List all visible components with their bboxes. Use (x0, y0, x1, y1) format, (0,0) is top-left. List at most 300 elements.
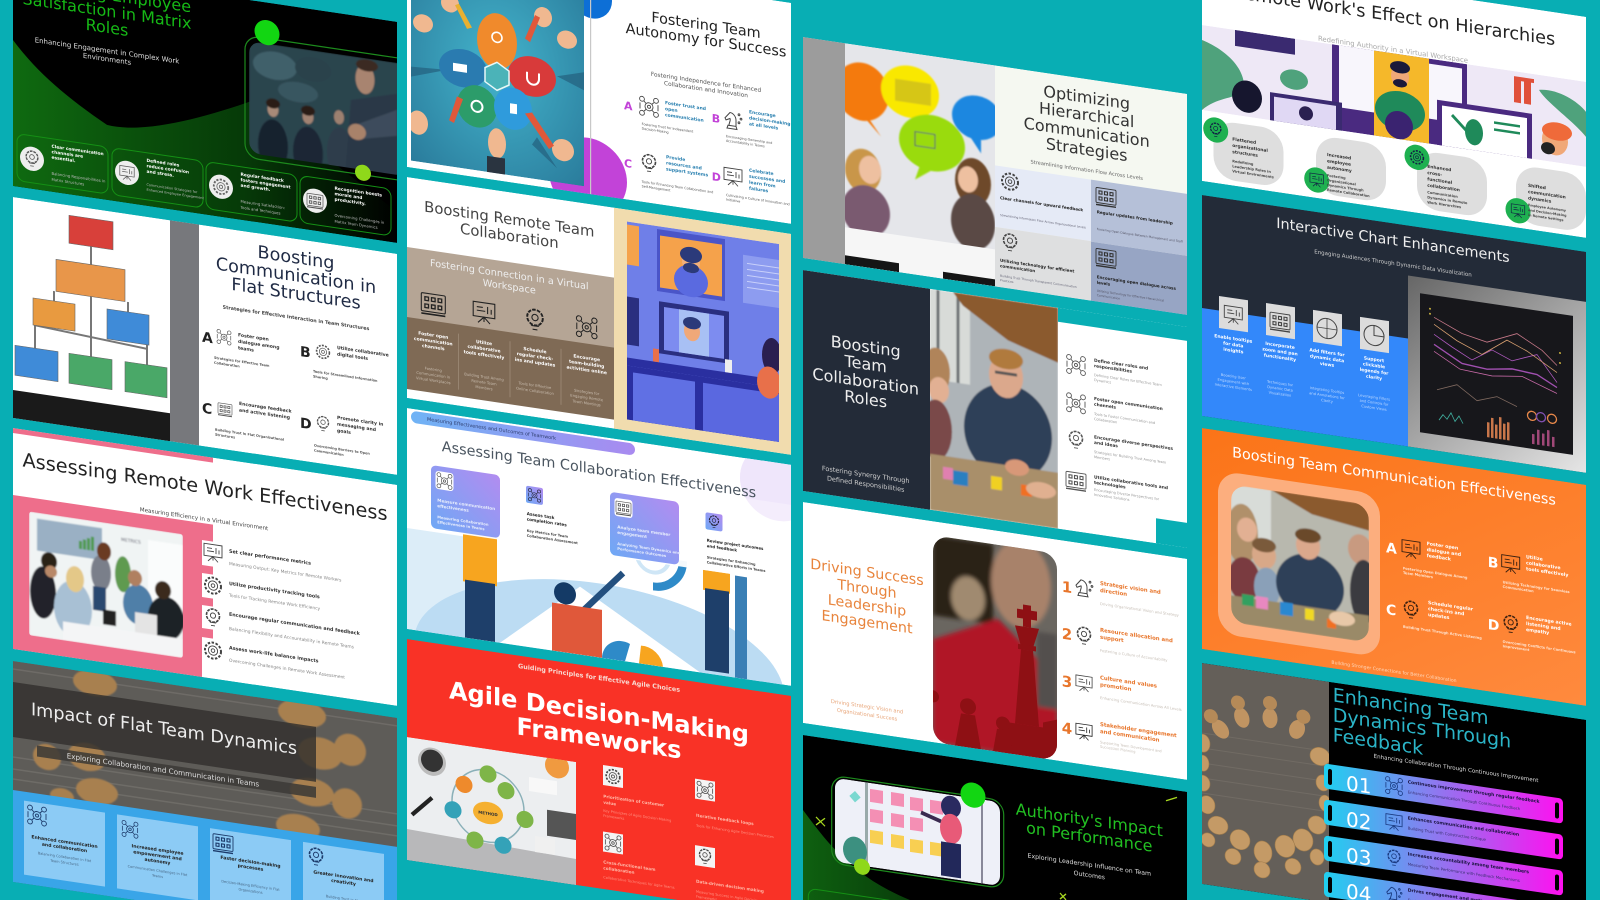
bar 01 (1324, 763, 1563, 827)
item D: Cultivating a Culture of Innovation and (726, 193, 790, 206)
cell 2: Regular updates from leadership (1097, 209, 1173, 226)
item A (624, 94, 706, 140)
bottom card (808, 888, 896, 900)
column 2: tools effectively (464, 349, 504, 361)
item C: resources and (666, 160, 702, 172)
column 3: Clarity (1321, 398, 1334, 404)
item 4: Utilize collaborative tools and (1094, 475, 1168, 491)
item B: Communication (1503, 585, 1534, 593)
item 3: Cross-functional team (603, 859, 655, 872)
title: Boosting Team Communication Effectiveness (1232, 445, 1556, 509)
card 3: Organizations (238, 887, 263, 895)
item 3 (206, 608, 361, 651)
item C: Encourage feedback (239, 402, 292, 415)
item C: Structures (215, 433, 235, 440)
title: on Performance (1026, 818, 1153, 856)
card C: Performance Outcomes (617, 547, 667, 558)
slide: Boosting Remote Team Collaboration (407, 177, 791, 455)
card A: Measuring Collaboration (437, 515, 488, 527)
analytics illustration (407, 490, 784, 781)
slide: Boosting Communication in Flat Structures (13, 197, 397, 475)
item D (706, 512, 765, 573)
card A: effectiveness (437, 503, 469, 513)
item B (526, 486, 578, 545)
card 1: Enhanced communication (31, 835, 98, 850)
column 2: Utilize (476, 340, 492, 347)
column 2 (464, 300, 504, 393)
column 4: and Controls for (1360, 399, 1389, 407)
column 3: Online Collaboration (516, 386, 555, 396)
column 3: dynamic data (1310, 353, 1344, 364)
card C: engagement (617, 530, 647, 539)
item 3 (1070, 431, 1173, 471)
item D: Overcoming Conflicts for Continuous (1503, 640, 1576, 654)
column 2: Incorporate (1265, 342, 1295, 351)
column 1: Boosting User (1221, 373, 1246, 380)
column 2: functionality (1264, 353, 1296, 363)
item B: B (300, 344, 311, 362)
accent circles (854, 765, 986, 893)
item 3: Balancing Flexibility and Accountability in Remote Teams (229, 626, 355, 651)
column 4: clarity (1366, 374, 1382, 382)
item 1 (1067, 354, 1162, 392)
photo frame (1218, 470, 1380, 657)
item D (712, 162, 790, 211)
bar 01: Continuous improvement through regular feedback (1408, 779, 1541, 805)
card 4 (303, 842, 384, 900)
grey band (170, 220, 199, 446)
item 2 (205, 576, 321, 612)
item B: Utilize collaborative (337, 346, 389, 359)
title: Impact of Flat Team Dynamics (31, 700, 297, 759)
item C: and active listening (239, 407, 290, 421)
title: Assessing Remote Work Effectiveness (22, 449, 388, 525)
item 4 (695, 845, 764, 900)
title: Assessing Team Collaboration Effectiveness (442, 439, 756, 502)
card 2 (1304, 133, 1386, 203)
cell 4: Utilizing Technology for Effective Hierarchical (1097, 289, 1164, 303)
card 4: in Remote Settings (1528, 213, 1563, 222)
item 1 (603, 765, 671, 828)
blue panel (13, 790, 397, 900)
column 3: Tools for Effective (519, 381, 551, 390)
column 1: Communication in (416, 371, 451, 380)
title: Leadership (828, 592, 906, 620)
column 1 (1214, 295, 1253, 392)
slide: Optimizing Hierarchical Communication Strategies (803, 37, 1187, 316)
title: Engagement (821, 608, 913, 638)
item 1: 1 (1062, 578, 1072, 597)
cell 4: levels (1097, 280, 1111, 287)
title: Dynamics Through (1333, 703, 1511, 753)
item 2 (1062, 622, 1173, 663)
item A: A (624, 99, 633, 113)
item 1 (1062, 575, 1180, 618)
item D: Improvement (1503, 644, 1530, 652)
card 1: organizational (1232, 143, 1268, 154)
card 3: Dynamics in Remote (1427, 195, 1468, 205)
subtitle: Defined Responsibilities (827, 474, 905, 494)
item D: Promote clarity in (337, 416, 383, 428)
card 2: Defined roles (146, 159, 179, 169)
subtitle: Enhancing Collaboration Through Continuous Improvement (1374, 754, 1539, 784)
item A: Foster open (238, 333, 269, 343)
card 1: Balancing Responsibilities in (52, 171, 105, 184)
cell 4 (1091, 242, 1187, 316)
column 3: Add filters for (1309, 348, 1345, 358)
slide: Authority's Impact on Performance (803, 735, 1187, 900)
card 3 (210, 828, 291, 900)
title: Agile Decision-Making (449, 676, 749, 749)
bar 03 (1324, 835, 1563, 899)
column 3: and Annotations for (1309, 391, 1345, 400)
item D: D (712, 170, 721, 184)
item C: Building Trust in Flat Organizational (215, 428, 284, 442)
title: Boosting (258, 243, 334, 274)
cell 2 (1091, 180, 1187, 256)
item 4: Stakeholder engagement (1100, 722, 1177, 739)
subtitle: Fostering Connection in a Virtual (430, 258, 589, 292)
item D: failures (749, 186, 769, 194)
item A: teams (238, 345, 254, 354)
title: Roles (86, 15, 128, 40)
item 1: Dynamics (1094, 378, 1111, 385)
item A: Fostering Trust for Independent (642, 122, 693, 134)
column 4: Leveraging Filters (1358, 393, 1390, 402)
card 4: communication (1528, 189, 1566, 201)
column 4: Encourage (573, 354, 600, 363)
title: Through (836, 577, 897, 602)
card 2: Dynamics Through (1327, 183, 1364, 193)
item D: empathy (1526, 627, 1549, 636)
title: Hierarchical (1039, 98, 1134, 131)
slide: Interactive Chart Enhancements (1202, 195, 1586, 473)
card 2: employee (1327, 158, 1351, 168)
column 3: Integrating Tooltips (1310, 386, 1344, 395)
column 4: Engaging Remote (570, 393, 604, 402)
item B: Sharing (313, 374, 328, 381)
item C: updates (1428, 612, 1450, 621)
item 2: Fostering a Culture of Accountability (1100, 649, 1168, 663)
title: Authority's Impact (1016, 800, 1163, 840)
sparkles (816, 744, 1177, 900)
title: Collaboration (460, 220, 559, 252)
subtitle: Measuring Efficiency in a Virtual Environment (140, 507, 269, 532)
item B: Encouraging Ownership and (726, 134, 772, 145)
item C: Tools for Enhancing Team Collaboration and (642, 180, 713, 194)
column 2: Members (475, 385, 493, 391)
column 1: Interactive Elements (1215, 382, 1252, 392)
pink panel (13, 428, 213, 679)
item 4: Overcoming Challenges in Remote Work Assessment (229, 658, 345, 681)
column 4 (1358, 317, 1390, 412)
photo: team at table (930, 289, 1058, 528)
bar 04 (1324, 871, 1563, 900)
item C: Provide (666, 155, 685, 163)
bar 02 (1324, 799, 1563, 863)
item B: Utilize (1526, 555, 1543, 563)
item D: successes and (749, 174, 785, 185)
item D: messaging and (337, 421, 376, 433)
card A: Measure communication (437, 498, 495, 511)
slide: Remote Work's Effect on Hierarchies (1202, 0, 1586, 238)
item B: at all levels (749, 121, 778, 132)
item 2 (1067, 392, 1163, 431)
title: Team (844, 351, 887, 377)
tan panel (407, 247, 614, 349)
item B: Assess task (527, 511, 554, 520)
item 1 (204, 543, 342, 584)
card 2 (117, 814, 198, 900)
item B (1488, 549, 1570, 599)
item C (624, 148, 713, 199)
card 2: Enhanced Employee Engagement (146, 188, 204, 200)
item 4: Succession Planning (1100, 745, 1135, 754)
subtitle: Engaging Audiences Through Dynamic Data Visualization (1314, 249, 1472, 279)
item D (1488, 609, 1576, 659)
column 1: for data (1223, 341, 1243, 350)
item 1: Define clear roles and (1094, 359, 1148, 372)
card 2: Teams (151, 873, 163, 879)
title: Optimizing (1043, 82, 1130, 113)
card 4: Greater innovation and (313, 870, 374, 884)
column 4: clickable (1363, 361, 1385, 370)
column 2: Remote Team (471, 379, 497, 387)
card 4: morale and (334, 191, 362, 201)
item 3 (603, 832, 675, 890)
item A: A (1386, 540, 1397, 558)
slide: Assessing Team Collaboration Effectiveness (407, 390, 816, 786)
card 1: Redefining (1232, 159, 1253, 166)
column 4: team-building (569, 359, 604, 370)
title: Driving Success (810, 557, 924, 589)
card 1: Flattened (1232, 138, 1256, 146)
item B: Tools for Streamlined Information (313, 369, 377, 383)
card 1: structures (1232, 149, 1258, 159)
column 4: activities online (566, 364, 607, 376)
cell 3 (995, 227, 1091, 301)
item C (1386, 594, 1482, 640)
item 2: Tools for Tracking Remote Work Efficiency (228, 593, 321, 612)
card 3: processes (238, 863, 264, 873)
item 3: Strategies for Building Trust Among Team (1094, 450, 1166, 465)
title: Roles (844, 386, 887, 412)
card 3: Tools and Techniques (240, 205, 280, 216)
brown panel (407, 317, 614, 420)
card 3: and growth. (240, 183, 271, 193)
item B: B (712, 112, 720, 126)
item 3: collaboration (603, 865, 634, 875)
card C: Analyzing Team Dynamics and (617, 542, 680, 555)
title: Collaboration (812, 364, 919, 399)
column 4: Team Meetings (572, 399, 601, 407)
item 4: Supporting Team Development and (1100, 740, 1162, 753)
item B: tools effectively (1526, 566, 1568, 579)
card 3: Faster decision-making (220, 856, 281, 870)
cell 4: Communication (1097, 293, 1120, 301)
slide: Agile Decision-Making Frameworks (407, 639, 791, 900)
cell 1: Clear channels for upward feedback (1000, 195, 1083, 212)
item A: Fostering Open Dialogue Among (1403, 566, 1467, 580)
card 2: Increased (1327, 153, 1351, 162)
card 3 (206, 162, 297, 222)
column 4: Support (1364, 356, 1384, 364)
card 3: Work Hierarchies (1427, 200, 1461, 209)
item 3: and ideas (1094, 440, 1118, 449)
column 1: channels (422, 343, 445, 352)
item B (301, 344, 388, 382)
photo: two women and speech bubbles (845, 43, 995, 286)
column 1: Enable tooltips (1214, 334, 1252, 345)
cell 3: Building Trust Through Transparent Communication (1000, 274, 1077, 289)
item 3: Collaborative Techniques for Agile Teams (603, 875, 675, 890)
title: Communication in (216, 255, 376, 298)
slide: Driving Success Through Leadership Engagement (803, 502, 1187, 780)
card 1 (1203, 116, 1284, 188)
wood pieces photo (1202, 663, 1329, 900)
cell 1: Streamlining Information Flow Across Organizational Levels (1000, 213, 1086, 230)
item C: check-ins and (1428, 606, 1464, 617)
card 2: empowerment and (133, 849, 182, 862)
item D: Strategies for Enhancing (707, 555, 756, 567)
title: Enhancing Team (1333, 683, 1488, 729)
card 2: Increased employee (132, 844, 183, 857)
title band (13, 682, 316, 782)
beige frame (614, 208, 791, 455)
slide: Employee Satisfaction in Matrix Roles (13, 0, 419, 246)
subtitle: Outcomes (1074, 870, 1105, 881)
column 3: ins and updates (515, 357, 556, 369)
item C: C (1386, 602, 1396, 620)
accent circles (254, 18, 371, 182)
column 1: Engagement with (1217, 378, 1249, 386)
item 3: 3 (1062, 672, 1072, 692)
column 1: Fostering (425, 366, 442, 373)
card 1 (17, 134, 108, 194)
green wave (13, 40, 397, 243)
item D: Communication (314, 449, 344, 457)
item 1: Defining Clear Roles for Effective Team (1094, 373, 1162, 387)
item A: Collaboration (214, 361, 240, 369)
subtitle: Exploring Collaboration and Communication in Teams (67, 751, 259, 789)
column 4: Strategies for (574, 389, 599, 396)
item 3: Encourage diverse perspectives (1094, 435, 1173, 452)
item 1: responsibilities (1094, 363, 1132, 375)
card 3: Measuring Satisfaction: (240, 199, 285, 210)
item 4: and communication (1100, 729, 1160, 744)
item 1: Key Principles of Agile Decision-Making (603, 809, 671, 823)
card 4: Recognition boosts (334, 187, 382, 199)
card 1: essential. (52, 155, 76, 164)
card 2: Communication Challenges in Flat (128, 864, 187, 877)
title: Boosting Remote Team (424, 198, 594, 241)
card 1: Team Structures (49, 858, 79, 867)
card C: Analyze team member (617, 524, 670, 537)
column 4 (566, 314, 607, 408)
item B: Utilizing Technology for Seamless (1503, 580, 1570, 594)
item D: D (300, 416, 312, 433)
card A: Effectiveness in Teams (437, 520, 485, 531)
subtitle: Redefining Authority in a Virtual Workspace (1318, 35, 1468, 65)
subtitle: Enhancing Engagement in Complex Work (35, 35, 179, 66)
title: Strategies (1046, 134, 1128, 165)
card 4: Overcoming Challenges in (334, 213, 384, 225)
subtitle: Collaboration and Innovation (664, 81, 748, 99)
card 4 (300, 175, 391, 236)
item 3: Members (1094, 455, 1110, 461)
title: Boosting (831, 332, 901, 361)
card 3: Decision-Making Efficiency in Flat (221, 879, 280, 892)
card 4: creativity (331, 878, 356, 888)
column 3: views (1320, 361, 1334, 369)
item C: Self-Management (642, 184, 671, 193)
item 4 (205, 641, 345, 681)
item A: dialogue among (238, 339, 279, 351)
card 1: and collaboration (42, 842, 87, 854)
item tabs (202, 540, 214, 679)
card 4: Matrix Team Dynamics (334, 219, 378, 230)
subtitle: Exploring Leadership Influence on Team (1028, 853, 1151, 878)
column 3 (1309, 309, 1345, 406)
item 4: Encouraging Diverse Perspectives for (1094, 488, 1159, 501)
photo: team meeting: METRICS (121, 537, 141, 546)
item 3: promotion (1100, 682, 1132, 693)
item 2: Foster open communication (1094, 397, 1163, 412)
illustration: hands and petals (411, 0, 584, 186)
item A: A (202, 330, 213, 347)
item 2: 2 (1062, 625, 1072, 644)
column 3 (515, 307, 556, 396)
corner circle (740, 439, 816, 527)
title: Flat Structures (231, 275, 361, 314)
item D: learn from (749, 180, 776, 190)
card 4: Employee Autonomy (1528, 203, 1566, 213)
item B: collaborative (1526, 560, 1561, 571)
item A: open (665, 107, 678, 114)
title: Frameworks (517, 712, 681, 765)
item 1: Measuring Output: Key Metrics for Remote Workers (229, 561, 342, 584)
pill tag: Measuring Effectiveness and Outcomes of Teamwork (427, 417, 556, 442)
item 1: Frameworks (603, 814, 625, 821)
card 2 (112, 148, 204, 208)
item B: decision-making (749, 115, 790, 127)
grey band (803, 37, 845, 264)
navy panel (803, 270, 930, 510)
item 2: Iterative feedback loops (696, 813, 754, 826)
item 4: Assess work-life balance impacts (229, 645, 319, 665)
card 3: fosters engagement (240, 177, 290, 191)
card 3: functional (1427, 176, 1453, 186)
card 4: productivity. (334, 197, 366, 207)
item C: C (624, 157, 632, 171)
column 3: regular check- (517, 351, 553, 362)
column 4: Custom Views (1361, 404, 1387, 412)
item 2: support (1100, 635, 1124, 644)
subtitle band (37, 746, 316, 798)
card 2: Remote Collaboration (1327, 188, 1370, 198)
item C: support systems (666, 166, 708, 179)
card 4: dynamics (1528, 195, 1552, 205)
item 2: Utilize productivity tracking tools (229, 581, 320, 600)
card 4: and Decision-Making (1528, 208, 1567, 218)
column 2 (1262, 302, 1298, 399)
subtitle: Strategies for Effective Interaction in Team Structures (223, 305, 369, 332)
card 1: Clear communication (52, 145, 104, 157)
item A: dialogue and (1427, 547, 1461, 558)
card 3: cross- (1427, 170, 1442, 178)
subtitle: Workspace (483, 278, 536, 297)
item A: Strategies for Effective Team (214, 356, 269, 368)
